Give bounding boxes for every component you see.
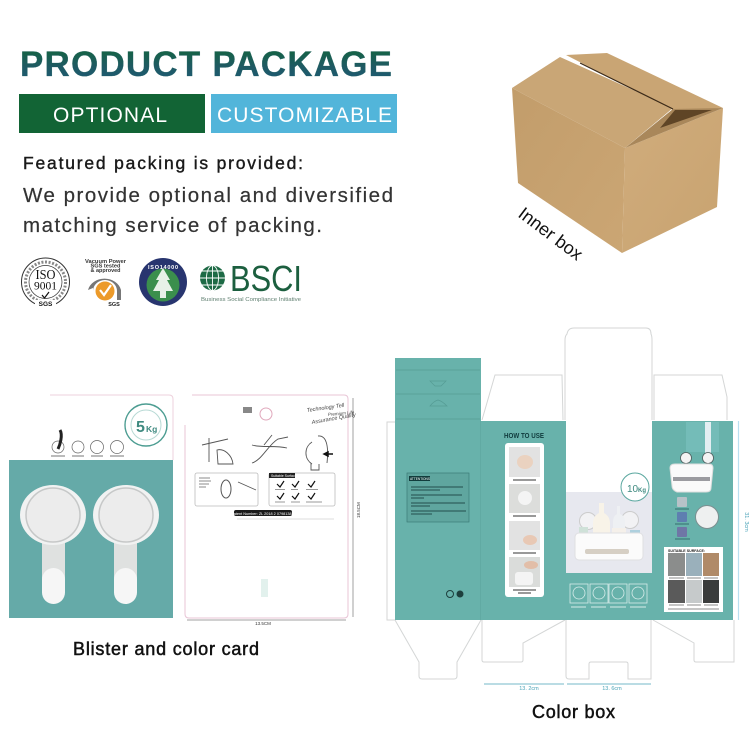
logo: SGS vacuum power: SGS — [108, 302, 120, 308]
attention box: ATTENTIONS — [410, 477, 430, 481]
patent number bar — [231, 510, 295, 516]
height dimension label: 31. 3cm — [743, 512, 749, 532]
logo: SGS vacuum power: & approved — [90, 268, 120, 274]
logo: ISO 14000 — [139, 258, 187, 306]
panel: how to use: HOW TO USE — [504, 433, 544, 440]
panel: back flap teal — [395, 358, 481, 620]
note box — [195, 473, 258, 506]
tagline scribble: Assurance Quality — [310, 412, 358, 426]
suitable surface box — [269, 473, 335, 506]
5kg badge: 5 — [136, 419, 145, 436]
banner: customizable: CUSTOMIZABLE — [217, 104, 392, 127]
certification logos — [22, 258, 302, 308]
panel: side product — [652, 421, 733, 620]
horizontal dimension: 13.5CM — [255, 621, 271, 626]
title: PRODUCT PACKAGE — [20, 45, 392, 84]
logo: ISO 14000: ISO14000 — [148, 265, 178, 271]
hook right — [93, 485, 159, 604]
tagline scribble — [306, 403, 358, 426]
box back flap — [566, 53, 723, 111]
tagline scribble: Technology Tell — [306, 403, 345, 414]
attention box — [407, 473, 469, 522]
5kg badge — [125, 404, 167, 446]
width dimension labels: 13. 2cm — [519, 686, 539, 692]
box right face — [622, 108, 723, 253]
banner: optional — [19, 94, 205, 133]
box left face — [512, 88, 625, 253]
push arrow — [324, 452, 333, 456]
color box dieline — [387, 328, 749, 692]
suitable surface card — [664, 547, 723, 612]
10kg badge — [621, 473, 649, 501]
panel: front product — [566, 421, 652, 620]
inner box illustration — [512, 53, 723, 253]
faint mark — [261, 579, 268, 597]
logo: ISO 9001: SGS — [39, 301, 53, 308]
width dimension labels: 13. 6cm — [602, 686, 622, 692]
banner: optional: OPTIONAL — [53, 104, 167, 127]
small logo mark — [243, 407, 252, 413]
suitable surface card: SUITABLE SURFACE: — [668, 549, 705, 553]
logo: ISO 9001: 9001 — [34, 278, 57, 292]
step captions — [513, 480, 536, 593]
hanging shelf — [670, 452, 714, 492]
recycling icons — [446, 590, 464, 598]
logo: SGS vacuum power — [85, 259, 126, 308]
description text: matching service of packing. — [23, 214, 322, 237]
usage diagrams — [202, 435, 328, 470]
suitable surface box: Suitable Surface — [271, 474, 297, 478]
step photos — [509, 447, 540, 587]
logo: SGS vacuum power: SGS tested — [90, 264, 120, 270]
banner: customizable — [211, 94, 397, 133]
shelf with bottles — [575, 503, 643, 560]
logo: ISO 9001: ISO — [36, 267, 56, 282]
vertical dimension: 18.5CM — [356, 502, 361, 518]
10kg badge: 10 — [627, 484, 639, 495]
feature icons — [51, 430, 124, 456]
box inner shadow — [625, 108, 723, 148]
10kg badge: Kg — [638, 488, 646, 494]
tagline scribble: Premium Life — [328, 410, 355, 417]
caption: color box: Color box — [532, 702, 615, 722]
5kg badge: Kg — [146, 424, 157, 434]
feature icon boxes — [570, 584, 647, 607]
description text — [23, 184, 393, 237]
logo: BSCI: Business Social Compliance Initiative — [201, 297, 301, 303]
hang hole — [260, 408, 272, 420]
detail circle — [696, 506, 718, 528]
hook left — [20, 485, 86, 604]
width dimension labels — [484, 684, 651, 692]
logo: BSCI — [200, 258, 302, 303]
caption: blister and color card: Blister and color card — [73, 639, 259, 659]
panel: how to use — [481, 421, 566, 620]
blister card back — [185, 395, 361, 626]
inner box label: Inner box — [515, 203, 587, 264]
logo: BSCI: BSCI — [230, 258, 302, 299]
teal background — [9, 460, 173, 618]
logo: SGS vacuum power: Vacuum Power — [85, 259, 126, 265]
dieline flaps — [387, 328, 734, 679]
blister card front — [9, 395, 173, 618]
patent number bar: Patent Number: ZL 2018 2 0798138.9 — [231, 512, 295, 516]
subheading: Featured packing is provided: — [23, 153, 303, 173]
material swatches — [675, 497, 690, 539]
description text: We provide optional and diversified — [23, 184, 393, 207]
box front flap — [512, 57, 673, 148]
logo: ISO 9001 — [22, 258, 70, 308]
